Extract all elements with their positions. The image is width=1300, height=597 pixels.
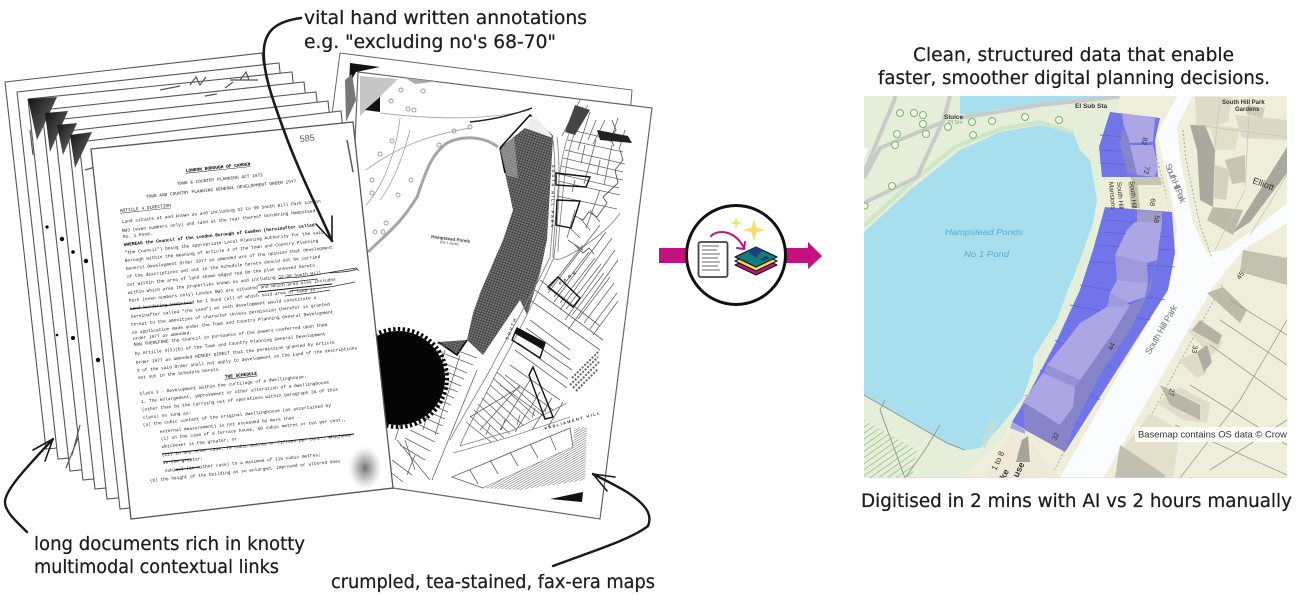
road labels: SOUTH — [504, 316, 518, 340]
blue site: south — [1012, 207, 1175, 452]
document body text: WHEREAS the Council of the London Borough of Camden (hereinafter called — [124, 222, 315, 248]
document body text: NW3 (even numbers only) and land at the rear thereof bordering Hampstead — [122, 208, 316, 234]
arrow: documents pointer — [5, 439, 53, 532]
back sheet corner shading — [345, 63, 380, 122]
document body text: out within the area of land shown edged red On the plan annexed hereto — [127, 263, 316, 288]
icon: document — [698, 242, 728, 277]
residential land east of the pond — [1094, 96, 1126, 246]
black plot — [514, 328, 545, 349]
label: features — [944, 100, 1265, 126]
south buildings near lake — [985, 430, 1060, 478]
document body text: (ii) in any other case, 70 cubic metres or fifteen per cent., whichever — [162, 432, 353, 458]
label: features: Gardens — [1235, 107, 1260, 113]
label: buildings — [990, 137, 1276, 481]
panel: stack of document pages — [5, 53, 382, 509]
label: buildings: 45 — [1236, 271, 1246, 281]
document body text: THE SCHEDULE — [225, 371, 258, 380]
map labels — [944, 100, 1276, 481]
label: features: Pl Sm — [948, 120, 963, 126]
shaded site area — [438, 128, 553, 355]
label: buildings: 82 — [1140, 137, 1148, 146]
pond label: Hampstead Ponds — [431, 234, 471, 244]
road labels: PARLIAMENT HILL — [544, 410, 601, 431]
document heading: TOWN & COUNTRY PLANNING ACT 1971 — [177, 172, 263, 187]
title: annotations callout — [304, 7, 587, 53]
document body text: by Article 4(3)(b) of the Town and Country Planning General Development — [135, 331, 326, 357]
panel: digitised map — [862, 95, 1287, 481]
document body text: Borough within the meaning of Article 4 of the Town and Country Planning — [125, 238, 319, 264]
label: buildings: 1 to 8 — [990, 449, 1007, 472]
header scribbles — [502, 90, 503, 91]
park grey paths — [864, 96, 1125, 203]
map linework — [360, 73, 632, 502]
road — [1060, 95, 1287, 478]
caption: maps callout: crumpled, tea-stained, fax-era maps — [331, 571, 655, 593]
label: buildings: Elliott — [1251, 175, 1276, 193]
document body text: 1. The enlargement, improvement or other alteration of a dwellinghouse — [141, 380, 330, 405]
document body text: (other than by the carrying out of operations within paragraph 2A of this — [142, 387, 339, 413]
pond outer water — [960, 96, 1106, 115]
panel: scanned map pages — [330, 53, 652, 519]
document body text — [122, 198, 358, 484]
pond bank line — [864, 122, 1073, 226]
front document page — [91, 122, 393, 519]
right margin shadow — [347, 140, 353, 172]
label: water — [945, 228, 1023, 259]
caption: documents callout: long documents rich in knotty — [34, 533, 305, 555]
document body text: within which area the properties known as and including 32-90 South Hill — [128, 270, 322, 296]
road pavement dashes — [1050, 130, 1222, 478]
label: buildings: 68 — [1148, 198, 1156, 207]
road labels — [504, 165, 601, 431]
document body text: (a) the cubic content of the original dwellinghouse (as ascertained by — [143, 403, 332, 428]
street plots — [450, 105, 620, 446]
arrow: annotation pointer — [264, 18, 332, 241]
label: buildings: South Hill — [1115, 182, 1124, 210]
label: buildings: 58 — [1152, 215, 1160, 224]
document heading: ARTICLE 4 DIRECTION — [120, 203, 172, 214]
document body text: class) so long as: — [143, 410, 192, 421]
back map sheet — [330, 53, 632, 140]
document body text: on application made under the Town and Country Planning General Development — [132, 309, 334, 336]
document body text: (i) in the case of a terrace house, 50 cubic metres or ten per cent., — [161, 417, 347, 442]
label: features: South Hill Park — [1222, 100, 1265, 106]
document body text: General Development Order 1977 as amended are of the opinion that development — [126, 245, 333, 272]
label: buildings: 33 — [1190, 345, 1198, 354]
title: annotations callout: e.g. "excluding no's 68-70" — [304, 31, 556, 53]
strip between the two sites — [1102, 177, 1170, 210]
north building masses — [1120, 113, 1158, 177]
map land — [960, 440, 1004, 478]
document body text: Land situate at and known as and including 32 to 90 South Hill Park London — [122, 198, 321, 225]
document body text: threat to the amenities of character Unless permission therefor is granted — [131, 301, 330, 328]
east block buildings north — [1190, 97, 1287, 235]
process arrow head — [786, 242, 822, 269]
blue site plot lines — [1025, 135, 1175, 425]
pale building edge — [980, 418, 1000, 448]
label: water: No 1 Pond — [964, 250, 1010, 259]
white map corner — [864, 148, 868, 160]
document body text: Class 1 - Development within the curtilage of a dwellinghouse. — [140, 374, 307, 397]
front map sheet — [340, 72, 652, 519]
document body text: "the Council") being the appropriate Local Planning Authority for the said — [125, 229, 324, 256]
black star blob — [349, 329, 447, 427]
east block long plots — [1175, 300, 1287, 478]
document body text: Park (even numbers only) London NW3 are situated and which area also includes — [129, 277, 336, 304]
document body text: subject (in either case) to a maximum of 115 cubic metres; — [165, 452, 321, 474]
title: annotations callout: vital hand written annotations — [304, 7, 587, 29]
stamped page number: 585 — [299, 132, 315, 144]
map frame lines — [864, 96, 1287, 478]
park paths — [366, 110, 530, 205]
east block buildings south — [1115, 250, 1287, 478]
right-edge shading — [565, 105, 632, 391]
document body text: 3 of the said Order shall not apply to development on the Land of the descriptions — [137, 345, 358, 374]
document body text: NOW THEREFORE the Council in pursuance of the powers conferred upon them — [134, 322, 328, 348]
document body text: whichever is the greater; or — [162, 436, 238, 450]
road labels: SOUTH HILL PARK — [550, 165, 555, 229]
label: streets: South Hill Park — [1163, 162, 1188, 205]
caption: digitisation time: Digitised in 2 mins with AI vs 2 hours manually — [861, 490, 1292, 512]
park trees — [370, 88, 472, 234]
icon: AI conversion badge — [686, 206, 786, 304]
document body text: is the greater; — [163, 456, 204, 466]
blue site: north — [1099, 112, 1160, 177]
pond bank — [368, 138, 498, 252]
label: buildings: 72 — [1142, 166, 1150, 175]
page scribbles — [30, 72, 258, 468]
document body text: order 1977 as amended. — [133, 330, 192, 342]
document heading: TOWN AND COUNTRY PLANNING GENERAL DEVELOPMENT ORDER 1977 — [146, 178, 297, 200]
main pond — [864, 125, 1097, 450]
handwritten annotations — [258, 268, 359, 296]
label: features: El Sub Sta — [1075, 103, 1108, 110]
label: buildings: ke — [998, 468, 1011, 481]
stepped building backs — [575, 120, 623, 254]
page corner shadows — [28, 97, 92, 168]
document body text: hereinafter called "the Land") as such development would constitute a — [131, 295, 317, 320]
toner smudge — [348, 446, 382, 490]
label: buildings: Mansions — [1107, 182, 1116, 211]
document body text: of the descriptions set out in the Schedule hereto should not be carried — [127, 254, 321, 280]
caption: documents callout — [34, 533, 305, 578]
hole punch marks — [45, 225, 123, 383]
label: buildings: 32 — [1051, 432, 1061, 442]
document body text: Land bordering Hampstead No 1 Pond (all of which said area of land is — [130, 287, 316, 312]
document body text: No. 1 Pond. — [123, 231, 153, 240]
lower-left green hatching — [864, 420, 917, 478]
handwritten strike-throughs — [130, 284, 354, 470]
document body text: (b) the height of the building as so enlarged, improved or altered does — [150, 458, 341, 484]
parkland — [864, 95, 1120, 478]
map linework: (No 1 pond) — [440, 240, 459, 246]
caption: output heading: Clean, structured data that enable — [913, 44, 1234, 66]
arrow: maps pointer — [553, 474, 649, 566]
caption: output heading: faster, smoother digital planning decisions. — [878, 67, 1270, 89]
caption: documents callout: multimodal contextual links — [34, 556, 279, 578]
caption: output heading — [878, 44, 1270, 89]
process arrow tail — [659, 248, 687, 263]
east block plot lines — [1195, 97, 1287, 250]
document body text: set out in the Schedule hereto. — [138, 366, 221, 381]
label: buildings: South Hill — [1128, 181, 1137, 209]
label: buildings: 27 — [1167, 388, 1175, 397]
bold outlined plots — [512, 173, 590, 419]
road labels: PARK — [558, 269, 579, 286]
corner hatching — [360, 76, 398, 116]
basemap attribution: Basemap contains OS data © Crow — [1138, 430, 1287, 440]
label: streets — [1143, 162, 1188, 356]
label: features: Sluice — [944, 114, 964, 121]
document heading — [120, 161, 297, 214]
icon: sparkles — [730, 217, 765, 241]
label: buildings: 44 — [1107, 342, 1117, 352]
icon: curved arrow — [711, 232, 745, 249]
label: streets: South Hill Park — [1143, 303, 1179, 356]
label: buildings: use — [1011, 461, 1026, 479]
lower hatched area — [483, 427, 587, 490]
label: water: Hampstead Ponds — [945, 228, 1023, 237]
document heading: LONDON BOROUGH OF CAMDEN — [186, 161, 251, 174]
south building masses — [1010, 210, 1162, 452]
lower terrace block — [452, 428, 573, 488]
document body text: external measurement) is not exceeded by more than - — [160, 415, 300, 435]
document body text: Order 1977 as amended HEREBY DIRECT that the permission granted by Article — [136, 339, 335, 366]
icon: map layers — [735, 247, 777, 275]
park trees — [862, 110, 1062, 209]
